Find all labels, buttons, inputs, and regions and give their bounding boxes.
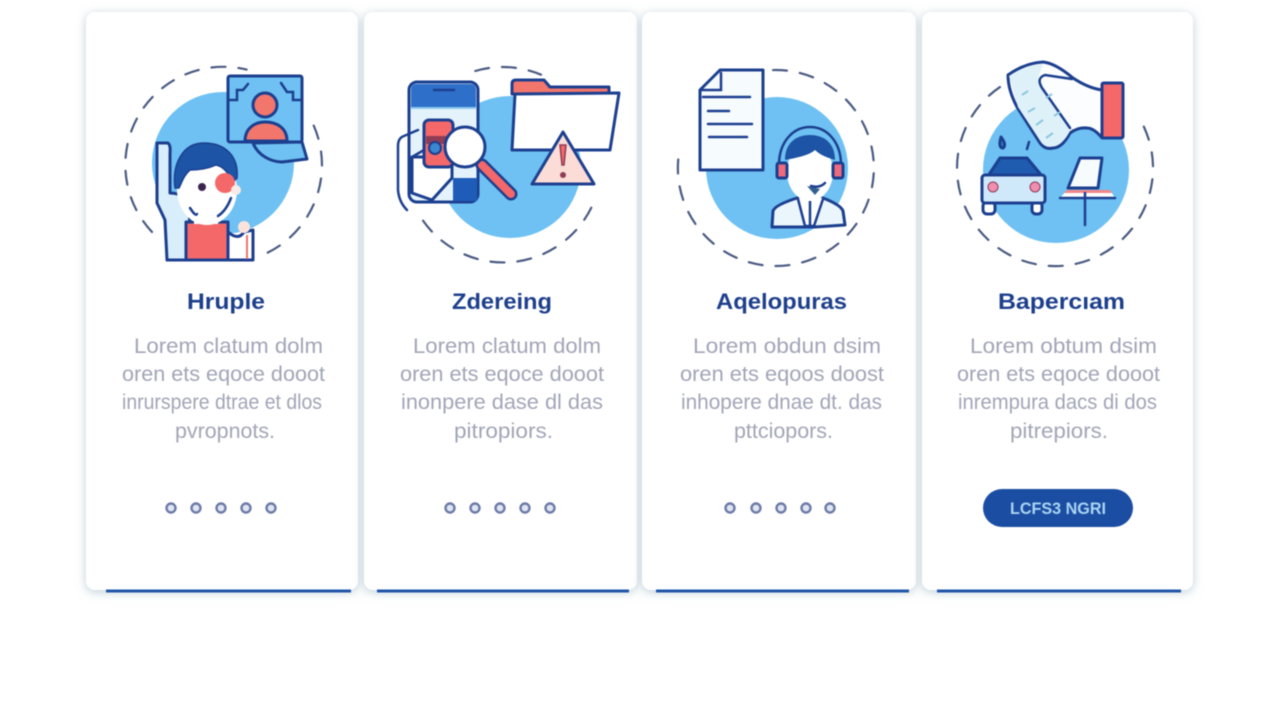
button bbox=[983, 489, 1133, 527]
body text bbox=[122, 335, 325, 443]
body text: oren ets eqoce dooot bbox=[122, 363, 325, 386]
panel: card 3 bbox=[642, 12, 916, 591]
body text: inrurspere dtrae et dlos bbox=[122, 391, 322, 414]
body text: Lorem obtum dsim bbox=[970, 335, 1157, 358]
body text bbox=[680, 335, 884, 443]
icon: person with photo frame bbox=[125, 67, 322, 260]
heading: Hruple bbox=[187, 289, 265, 314]
heading: Zdereing bbox=[452, 289, 552, 314]
icon: phone scan with folder warning bbox=[398, 67, 619, 262]
pagination dots bbox=[166, 504, 276, 512]
icon: document and support agent bbox=[678, 70, 874, 266]
body text: Lorem clatum dolm bbox=[134, 335, 323, 358]
body text: Lorem obdun dsim bbox=[693, 335, 881, 358]
body text: pitropiors. bbox=[454, 420, 553, 443]
bottom bar bbox=[377, 590, 629, 592]
body text: pvropnots. bbox=[175, 420, 275, 443]
bottom bar bbox=[656, 590, 909, 592]
body text: oren ets eqoce dooot bbox=[400, 363, 604, 386]
body text: inrempura dacs di dos bbox=[958, 391, 1157, 414]
body text: oren ets eqoce dooot bbox=[957, 363, 1160, 386]
panel: card 2 bbox=[364, 12, 637, 591]
button: LCFS3 NGRI bbox=[1010, 499, 1106, 518]
body text: oren ets eqoos doost bbox=[680, 363, 884, 386]
body text: inhopere dnae dt. das bbox=[681, 391, 882, 414]
body text: pitrepiors. bbox=[1010, 420, 1108, 443]
bottom bar bbox=[937, 590, 1181, 592]
body text: inonpere dase dl das bbox=[401, 391, 603, 414]
panel: card 4 bbox=[922, 12, 1193, 591]
body text: Lorem clatum dolm bbox=[413, 335, 601, 358]
heading: Bapercıam bbox=[998, 289, 1125, 314]
pagination dots bbox=[446, 504, 554, 512]
panel: card 1 bbox=[86, 12, 358, 591]
body text bbox=[400, 335, 604, 443]
pagination dots bbox=[726, 504, 834, 512]
body text: pttciopors. bbox=[734, 420, 833, 443]
bottom bar bbox=[106, 590, 351, 592]
icon: hand over car and table bbox=[957, 62, 1153, 266]
body text bbox=[957, 335, 1160, 443]
heading: Aqelopuras bbox=[716, 289, 847, 314]
